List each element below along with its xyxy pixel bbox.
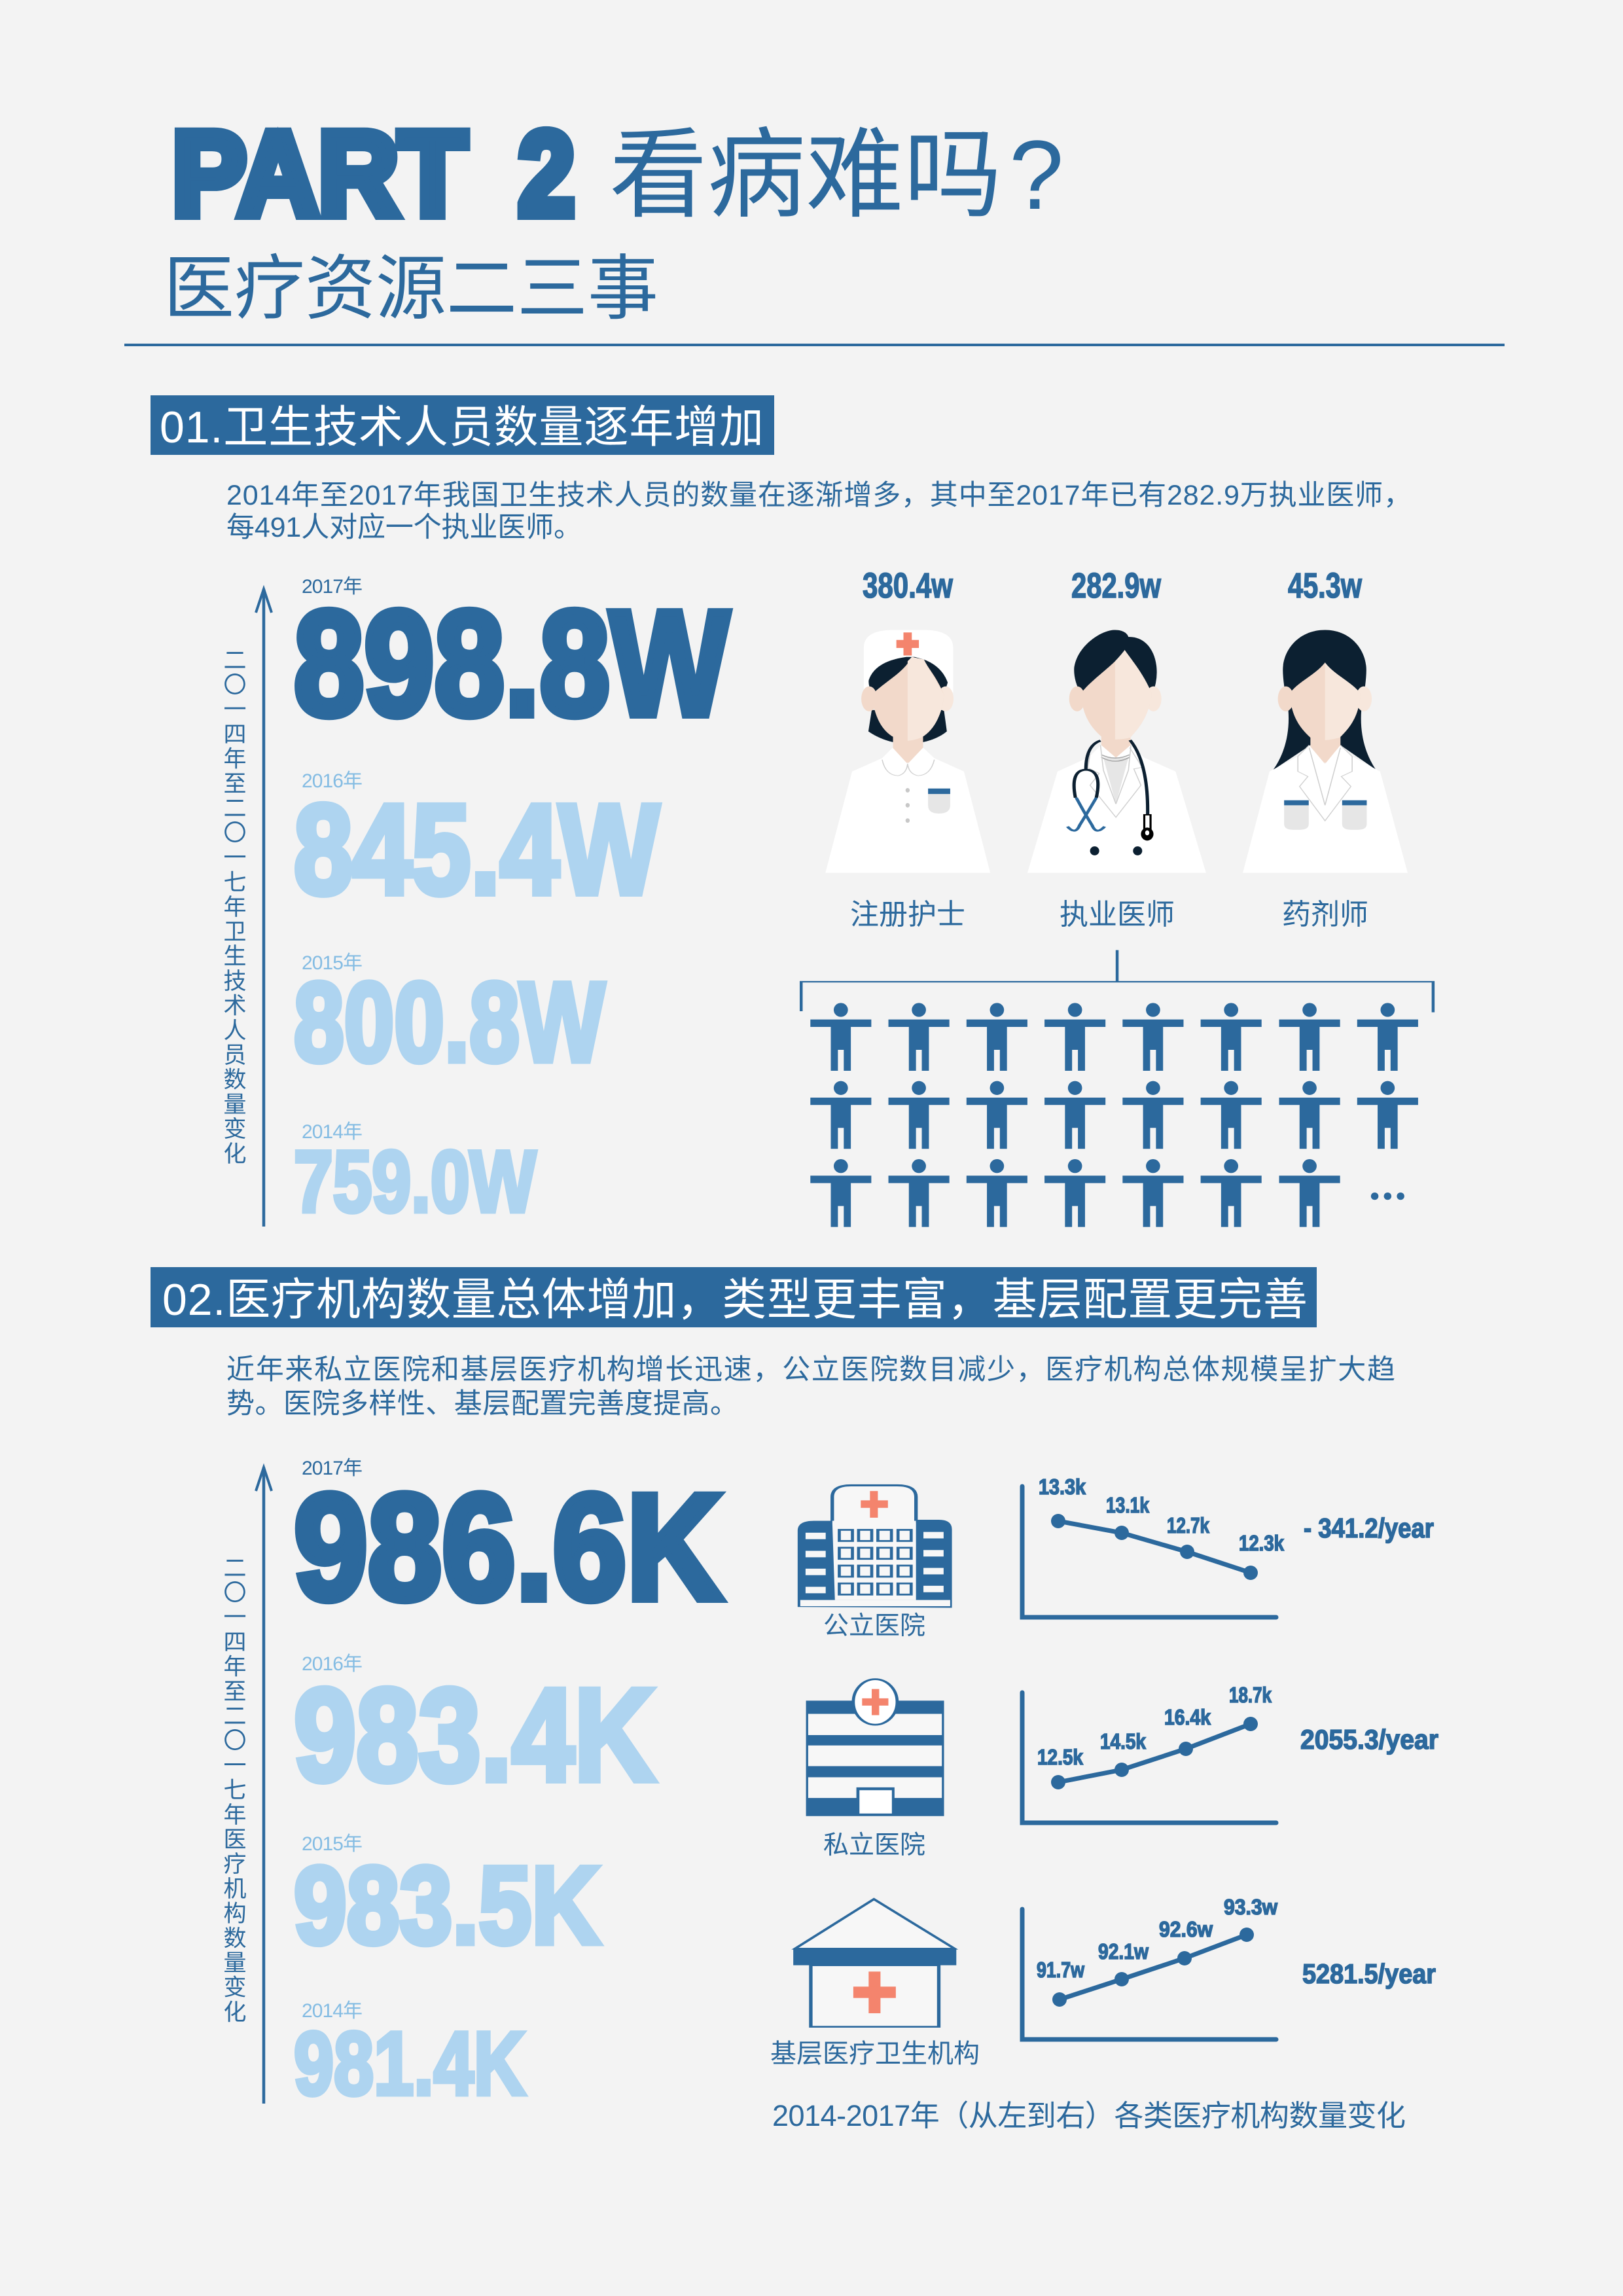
title: ? [1009, 120, 1063, 230]
text block: section 1 intro: 每491人对应一个执业医师。 [226, 512, 582, 543]
line chart: public hospital: 13.3k [1039, 1475, 1086, 1499]
year label 2015: 2015年 [302, 1833, 363, 1855]
figure names row [850, 899, 1368, 931]
title: 看病难吗 [609, 120, 1002, 230]
figure values row: 380.4w [863, 566, 954, 605]
panel: section 1 heading: 01.卫生技术人员数量逐年增加 [160, 403, 764, 452]
icon: primary care clinic [793, 1899, 956, 2027]
rate: primary care: 5281.5/year [1302, 1958, 1436, 1989]
icon: pharmacist [1243, 630, 1408, 873]
icon: private hospital [806, 1679, 944, 1816]
line chart: private hospital: 14.5k [1100, 1729, 1147, 1753]
text block: section 2 intro [226, 1354, 1395, 1420]
line chart: primary care: 91.7w [1037, 1958, 1084, 1982]
value 2015: 800.8W [294, 960, 605, 1085]
year label 2015: 2015年 [302, 952, 363, 974]
subtitle: 医疗资源二三事 [164, 249, 658, 328]
panel: section 2 heading: 02.医疗机构数量总体增加，类型更丰富，基层配置更完善 [162, 1275, 1308, 1325]
value 2017: 898.8W [294, 581, 729, 747]
value 2016: 983.4K [294, 1661, 655, 1808]
year label 2016: 2016年 [302, 770, 363, 792]
figure names row: 注册护士 [850, 899, 965, 931]
value 2017: 986.6K [294, 1463, 722, 1631]
label: primary care clinic: 基层医疗卫生机构 [770, 2039, 980, 2068]
label: public hospital: 公立医院 [823, 1612, 925, 1640]
line chart: public hospital: 13.1k [1106, 1493, 1150, 1517]
text block: section 1 vertical caption: 二〇一四年至二〇一七年卫生技术人员数量变化 [220, 648, 246, 1166]
arrow: section 1 timeline [256, 589, 272, 1227]
line chart: primary care: 93.3w [1224, 1895, 1277, 1919]
title: PART [172, 107, 467, 240]
chart: institutions by year [294, 1458, 722, 2114]
figure values row [863, 566, 1363, 605]
line chart: public hospital: 12.7k [1167, 1513, 1209, 1537]
line chart: public hospital [1022, 1475, 1285, 1617]
icon: nurse [825, 630, 990, 873]
line chart: public hospital: 12.3k [1239, 1531, 1285, 1555]
figure names row: 药剂师 [1282, 899, 1368, 931]
rate: public hospital: - 341.2/year [1304, 1513, 1434, 1543]
year label 2017: 2017年 [302, 1458, 363, 1479]
label: private hospital: 私立医院 [823, 1831, 925, 1859]
arrow: section 2 timeline [256, 1467, 272, 2104]
line chart: private hospital: 12.5k [1037, 1745, 1084, 1769]
chart: health workers by year [294, 576, 729, 1230]
rate: private hospital: 2055.3/year [1300, 1724, 1438, 1755]
year label 2017: 2017年 [302, 576, 363, 598]
title [172, 107, 1063, 240]
icon grid: people [810, 1003, 1418, 1227]
line chart: private hospital: 16.4k [1164, 1705, 1211, 1729]
figure names row: 执业医师 [1060, 899, 1175, 931]
icon: public hospital [798, 1485, 952, 1607]
value 2015: 983.5K [294, 1844, 600, 1967]
icon: doctor [1027, 630, 1206, 873]
text block: section 1 intro [226, 480, 1412, 543]
text block: section 2 intro: 势。医院多样性、基层配置完善度提高。 [226, 1388, 738, 1420]
line chart: primary care: 92.1w [1098, 1939, 1149, 1964]
value 2014: 759.0W [294, 1134, 536, 1230]
year label 2014: 2014年 [302, 2000, 363, 2022]
figure values row: 45.3w [1288, 566, 1363, 605]
line chart: private hospital [1022, 1683, 1276, 1823]
title: 2 [518, 107, 575, 240]
caption: chart note: 2014-2017年（从左到右）各类医疗机构数量变化 [772, 2099, 1406, 2132]
line chart: private hospital: 18.7k [1229, 1683, 1272, 1707]
line chart: primary care: 92.6w [1159, 1917, 1213, 1941]
text block: section 2 intro: 近年来私立医院和基层医疗机构增长迅速，公立医院数目减少，医疗机构总体规模呈扩大趋 [226, 1354, 1395, 1386]
line chart: primary care [1022, 1895, 1277, 2039]
year label 2016: 2016年 [302, 1653, 363, 1675]
bracket [801, 950, 1433, 1013]
text block: section 2 vertical caption: 二〇一四年至二〇一七年医疗机构数量变化 [220, 1556, 246, 2024]
figure values row: 282.9w [1071, 566, 1162, 605]
value 2016: 845.4W [294, 778, 659, 921]
text block: section 1 intro: 2014年至2017年我国卫生技术人员的数量在逐渐增多，其中至2017年已有282.9万执业医师， [226, 480, 1412, 511]
year label 2014: 2014年 [302, 1121, 363, 1143]
value 2014: 981.4K [294, 2014, 526, 2114]
